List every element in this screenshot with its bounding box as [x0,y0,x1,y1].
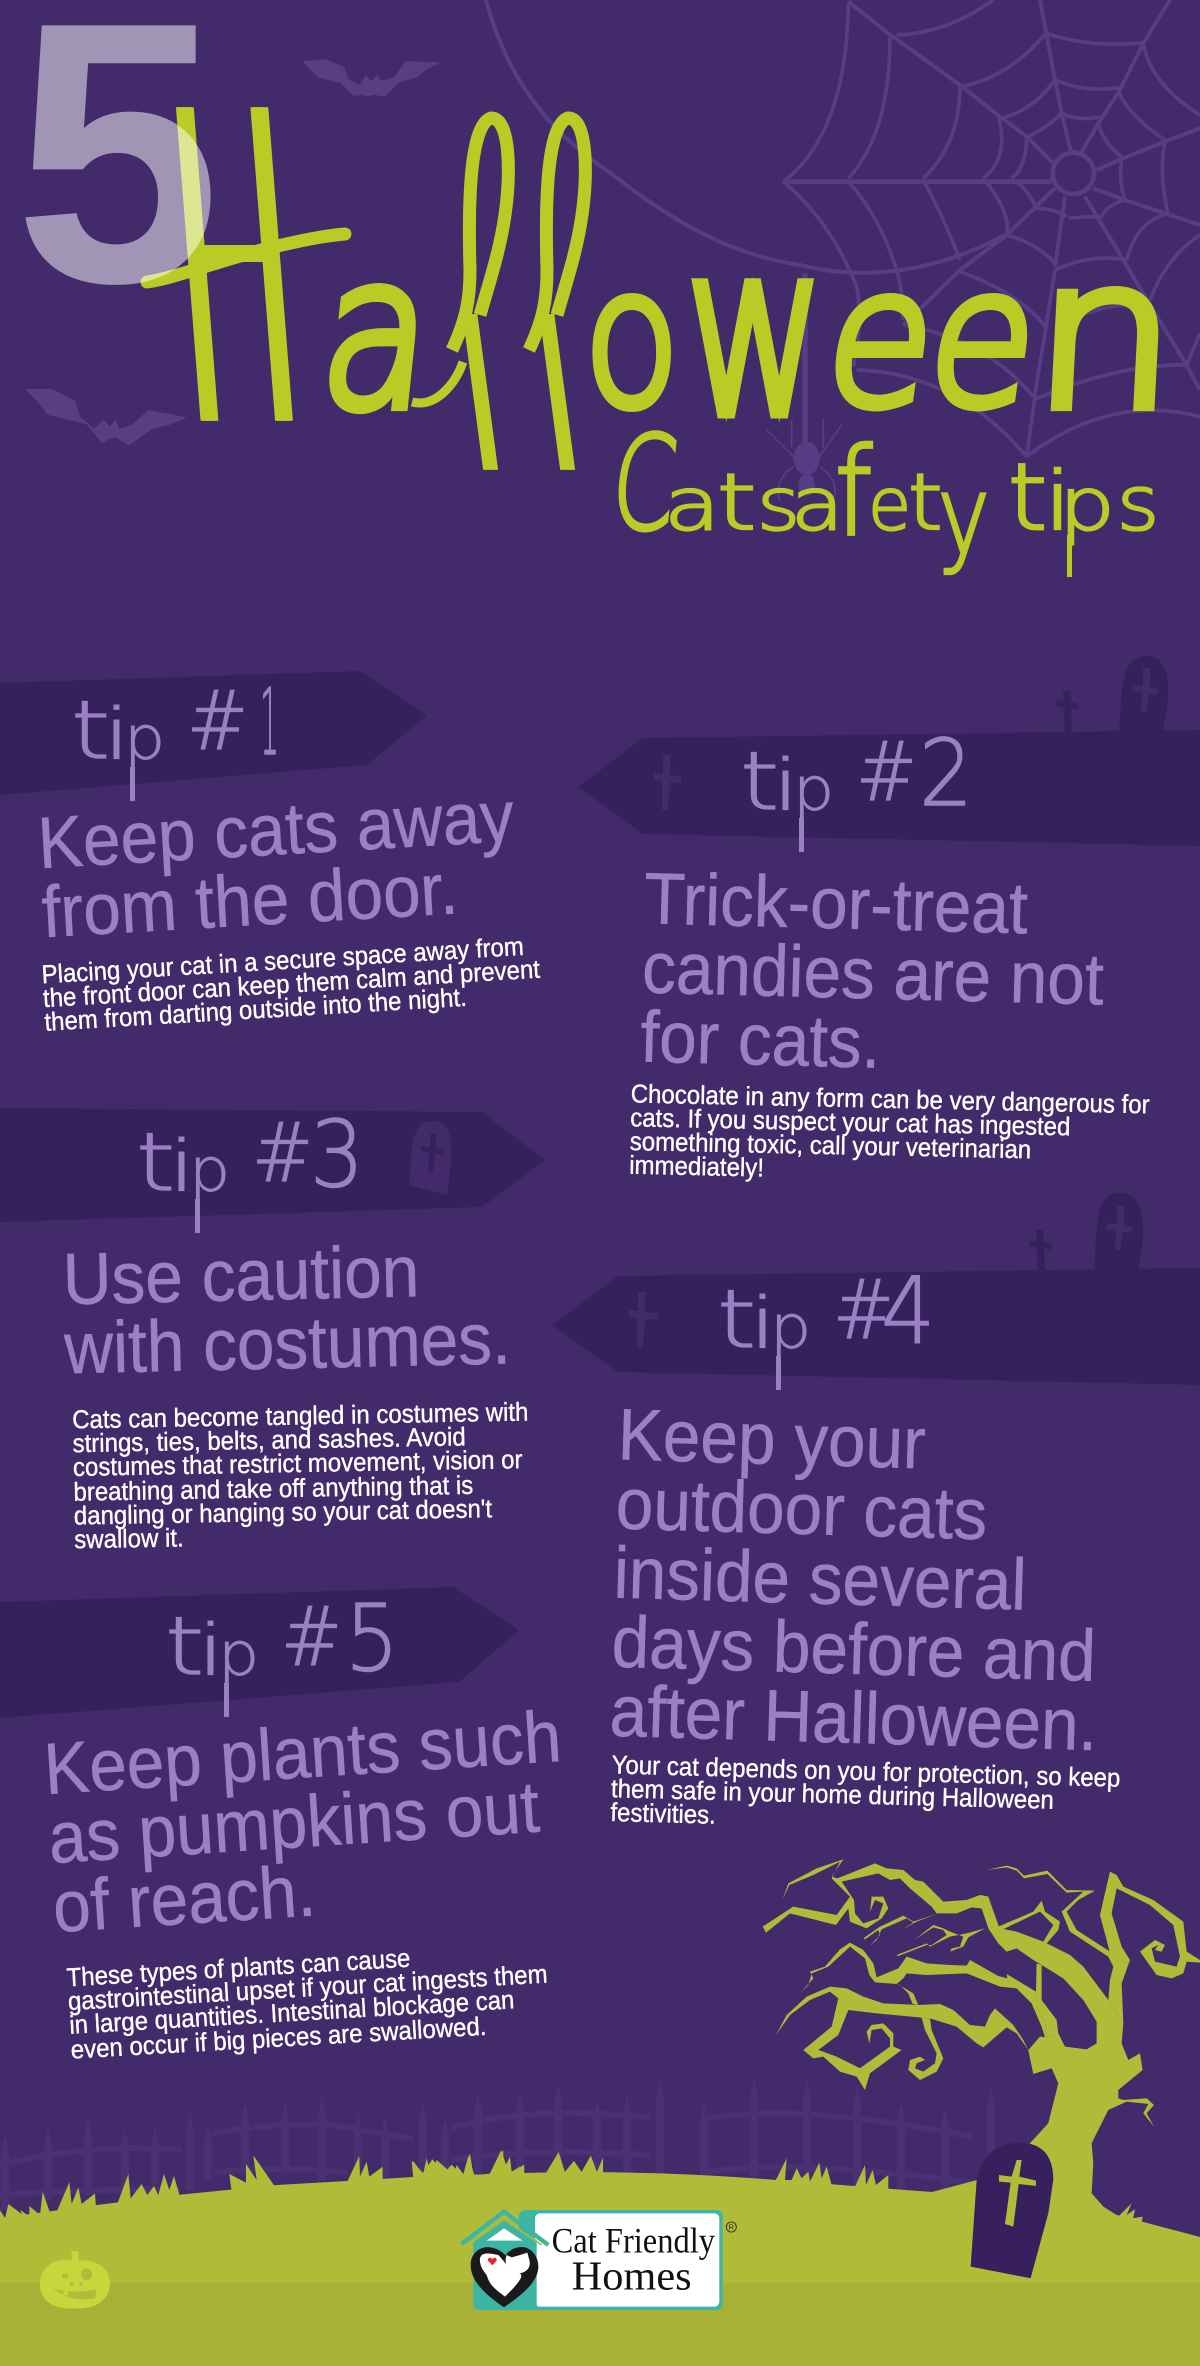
tip 1 heading: Keep cats away [36,776,516,884]
title: Halloween: o [584,227,679,450]
web outer arc [486,0,1005,273]
subtitle: Cat safety tips: f [835,422,872,563]
tip 4 body: them safe in your home during Halloween [611,1774,1054,1815]
tip 4 heading: after Halloween. [609,1671,1099,1766]
tip 4 body: Your cat depends on you for protection, so keep [611,1751,1121,1793]
tip 5 body: These types of plants can cause [66,1944,411,1993]
tip 5 label: t [165,1600,204,1693]
tip 3 body: dangling or hanging so your cat doesn't [74,1494,492,1531]
logo: Cat Friendly Homes: Cat Friendly [552,2221,715,2261]
lower branch with loop [776,1987,1028,2090]
banner tip 2 [578,730,1200,846]
subtitle: Cat safety tips: a [664,462,720,547]
subtitle: Cat safety tips: a [791,462,844,547]
tip 1 heading [36,776,516,953]
banner cross tip 2 [654,755,681,810]
tombstone cross tip 4 [1106,1206,1132,1250]
subtitle: Cat safety tips: C [605,408,684,560]
subtitle: Cat safety tips: t [908,457,943,548]
logo: Cat Friendly Homes: R [729,2223,734,2232]
tree [763,1859,1200,2250]
tip 5 label: i [197,1609,225,1691]
tip 2 heading: for cats. [639,997,882,1084]
logo: Cat Friendly Homes: Homes [572,2253,692,2299]
tip 2 label: i [772,744,800,826]
tip 2 body: cats. If you suspect your cat has ingested [630,1104,1071,1142]
tip 2 heading: candies are not [641,928,1105,1021]
tip 3 label: 3 [310,1101,364,1208]
top left limb [763,1859,988,1933]
tip 4 heading: days before and [611,1602,1097,1697]
tip 4 label: t [717,1273,756,1366]
spider [767,418,842,502]
tip 3 label: t [136,1116,175,1209]
title: Halloween: l [523,276,593,517]
banner tip 1 [0,671,427,795]
tombstone cross tip 2 [1132,668,1158,712]
tip 2 label: p [793,754,834,824]
title: Halloween: e [814,227,950,450]
tip 3 body: costumes that restrict movement, vision or [73,1446,523,1483]
tip 1 label: p [124,703,165,773]
tip 4 heading [609,1395,1099,1766]
tip 5 label: p [218,1619,259,1689]
title: Halloween: n [1029,215,1183,455]
banner tip 4 [552,1268,1200,1385]
tip 1 body: Placing your cat in a secure space away from [41,932,525,990]
tip 5 body: even occur if big pieces are swallowed. [70,2012,487,2065]
tip 1 heading: from the door. [40,849,460,953]
tip 5 label: # [281,1589,342,1685]
tip 3 label [136,1101,364,1233]
tombstones behind tip 2 banner [1056,656,1168,735]
tip 1 body [41,932,541,1038]
tip 4 label [717,1258,935,1390]
tip 4 body [610,1751,1121,1830]
subtitle: Cat safety tips: p [1059,462,1115,547]
tombstones behind tip 4 banner [1029,1193,1143,1276]
banner tombstone cross tip 3 [421,1134,444,1172]
tip 3 body: Cats can become tangled in costumes with [72,1398,529,1435]
tip 3 body: breathing and take off anything that is [73,1471,473,1507]
tip 2 label [740,720,973,852]
right branches [998,1901,1060,1943]
tip 1 label: # [187,673,248,769]
banner cross tip 4 [629,1292,658,1348]
title: Halloween: l [446,276,516,517]
subtitle: Cat safety tips: t [1008,444,1047,551]
title: Halloween: a [311,211,444,456]
subtitle: Cat safety tips: s [757,462,800,547]
spider web [783,0,1200,457]
tip 3 heading [62,1231,512,1390]
tip 2 body [629,1080,1150,1183]
bat lower [25,389,187,445]
tip 2 heading: Trick-or-treat [643,859,1029,950]
grass at tree [1117,2203,1143,2227]
tip 1 label: i [103,693,131,775]
tip 5 body: in large quantities. Intestinal blockage can [69,1986,515,2041]
tip 3 label: p [189,1135,230,1205]
tip 4 label: # [833,1262,894,1358]
tip 3 body: swallow it. [74,1524,184,1555]
fence rails [0,2113,972,2195]
tip 5 heading: Keep plants such [42,1696,564,1810]
front tombstone [971,2143,1053,2278]
tip 2 label: # [856,724,917,820]
grass tufts middle and right [413,2150,603,2176]
tip 4 label: 4 [881,1258,935,1365]
subtitle: Cat safety tips [605,408,1159,579]
subtitle: Cat safety tips: s [1117,460,1159,547]
tip 2 body: Chocolate in any form can be very dangerous for [630,1080,1150,1120]
tip 3 heading: Use caution [62,1231,420,1321]
subtitle: Cat safety tips: e [868,462,911,547]
banner tip 3 [0,1108,545,1222]
tip 2 body: immediately! [629,1151,764,1183]
tip 4 heading: Keep your [617,1395,927,1485]
tip 2 label: 2 [919,720,973,827]
grass tufts left [0,2150,520,2223]
title: Halloween: e [916,227,1052,450]
banner tip 5 [0,1587,519,1718]
title: Halloween: w [686,194,824,469]
tip 3 body [72,1398,529,1555]
tip 2 label: t [740,735,779,828]
bat upper [302,59,440,97]
tip 1 label: 1 [260,669,279,776]
tip 1 label [71,669,279,801]
title: Halloween [154,21,1183,524]
banner tombstone tip 3 [409,1121,451,1195]
tip 5 body [66,1944,548,2065]
tip 2 heading [639,859,1105,1084]
tip 1 body: the front door can keep them calm and prevent [42,955,541,1014]
tip 3 label: # [252,1105,313,1201]
tip 5 heading: of reach. [51,1851,318,1948]
tip 3 label: i [168,1125,196,1207]
subtitle: Cat safety tips: t [717,457,756,548]
thin twigs [863,1914,937,1945]
tip 5 label: 5 [345,1585,399,1692]
tip 1 body: them from darting outside into the night. [44,984,468,1038]
trunk and main limb [972,1895,1154,2250]
tip 1 label: t [71,684,110,777]
middle branch [800,1943,1047,2037]
tip 5 heading [42,1696,564,1948]
tip 4 label: i [749,1282,777,1364]
tip 4 body: festivities. [610,1798,716,1830]
ground hill [0,2150,1200,2366]
tip 2 body: something toxic, call your veterinarian [629,1127,1032,1165]
tip 5 heading: as pumpkins out [46,1767,542,1879]
subtitle: Cat safety tips: y [938,452,989,579]
tip 4 label: p [770,1292,811,1362]
graveyard fence [1,2078,995,2210]
tip 5 body: gastrointestinal upset if your cat ingests them [67,1960,548,2017]
tip 4 heading: outdoor cats [615,1464,988,1556]
tip 4 heading: inside several [613,1533,1028,1626]
subtitle: Cat safety tips: i [1044,455,1072,548]
tip 5 label [165,1585,399,1717]
pumpkin [40,2251,110,2309]
logo: Cat Friendly Homes [462,2210,736,2310]
title: Halloween: H [154,21,316,524]
tip 3 body: strings, ties, belts, and sashes. Avoid [72,1423,466,1459]
tip 3 heading: with costumes. [63,1298,512,1390]
